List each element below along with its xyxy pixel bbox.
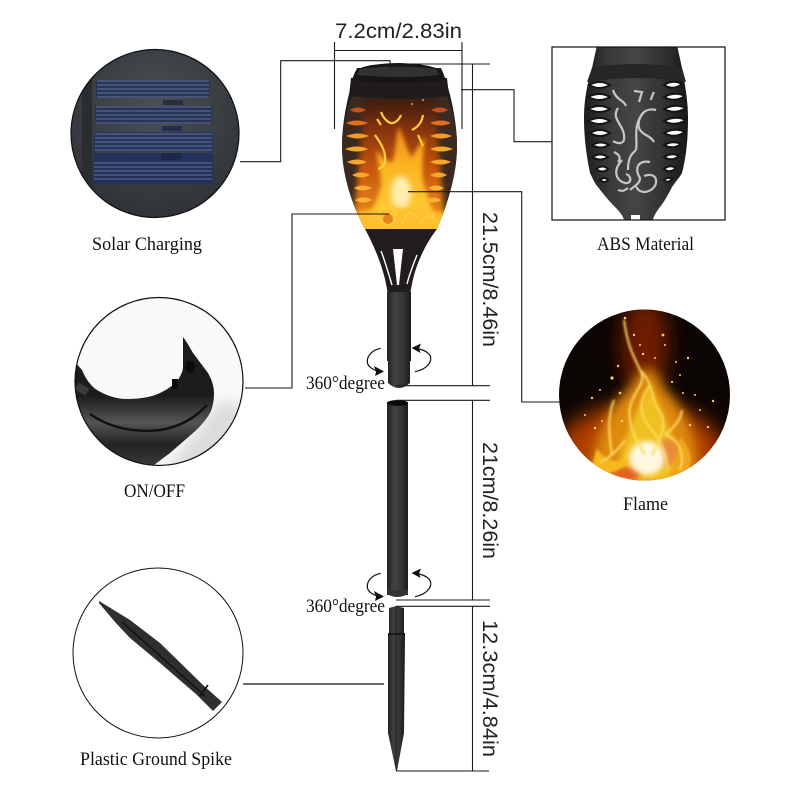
rotation marker: upper joint: 360°degree [306, 374, 385, 394]
foot openings [381, 249, 417, 285]
label: abs material: ABS Material [597, 234, 694, 255]
dimension: tube height [396, 400, 501, 600]
rotation marker: lower joint [306, 568, 431, 617]
air slots [588, 82, 686, 182]
flame body [370, 126, 434, 213]
leader: abs material [461, 90, 552, 142]
photo circle: switch [62, 298, 248, 470]
dimension: spike height [396, 606, 501, 771]
leader: ground spike [243, 683, 384, 685]
cap band [587, 64, 686, 82]
photo circle: spike [73, 568, 243, 738]
dimension: tube height: 21cm/8.26in [478, 442, 501, 559]
rotation marker: upper joint [306, 344, 431, 394]
rotation marker: lower joint: 360°degree [306, 597, 385, 617]
dimension: head width: 7.2cm/2.83in [335, 20, 462, 43]
dimension: head height: 21.5cm/8.46in [478, 212, 501, 347]
framed photo: unlit lamp head [552, 45, 725, 222]
lamp: head with flame [340, 63, 460, 388]
solar panel top [357, 66, 439, 77]
dimension: spike height: 12.3cm/4.84in [478, 620, 501, 757]
label: plastic ground spike: Plastic Ground Spike [80, 749, 232, 770]
leader: flame [408, 192, 560, 402]
side slots [345, 108, 453, 202]
dimension: head height [396, 64, 501, 386]
lamp: middle tube [387, 400, 408, 597]
label: solar charging: Solar Charging [92, 234, 202, 255]
panel: plastic ground spike [73, 568, 243, 770]
panel: abs material [552, 45, 725, 255]
callout leaders [240, 61, 560, 684]
solar cap [352, 63, 445, 83]
label: flame: Flame [623, 494, 668, 515]
photo circle: flame [559, 310, 730, 480]
panel: solar charging [71, 50, 239, 255]
flame pattern [613, 90, 656, 192]
photo circle: solar panel [71, 50, 239, 218]
neck [387, 292, 411, 388]
lit interior [340, 96, 460, 232]
dimension: head width [334, 20, 462, 129]
label: on/off: ON/OFF [124, 481, 185, 502]
panel: flame [559, 310, 730, 510]
cap band [349, 75, 449, 99]
lamp: ground spike [388, 606, 405, 771]
leader: on/off [245, 214, 389, 388]
panel: on/off switch [74, 296, 244, 497]
leader: solar charging [240, 61, 390, 162]
bottom notch [631, 215, 640, 220]
lamp body and foot [342, 68, 457, 294]
